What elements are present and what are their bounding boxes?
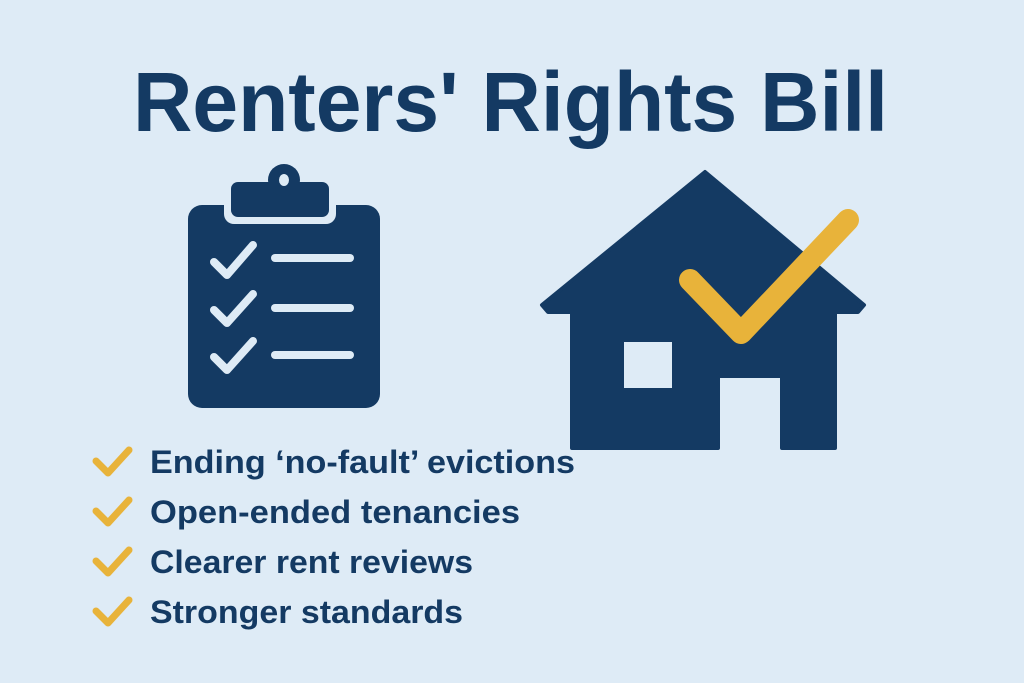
list: key changes: Stronger standards [150, 594, 463, 630]
list: key changes: Clearer rent reviews [150, 544, 473, 580]
list: key changes [96, 444, 575, 630]
list: key changes: Open-ended tenancies [150, 494, 520, 530]
list: key changes: Ending ‘no-fault’ evictions [150, 444, 575, 480]
title: Renters' Rights Bill [133, 55, 888, 149]
icon: house with check [542, 172, 864, 448]
icon: clipboard [188, 164, 380, 408]
